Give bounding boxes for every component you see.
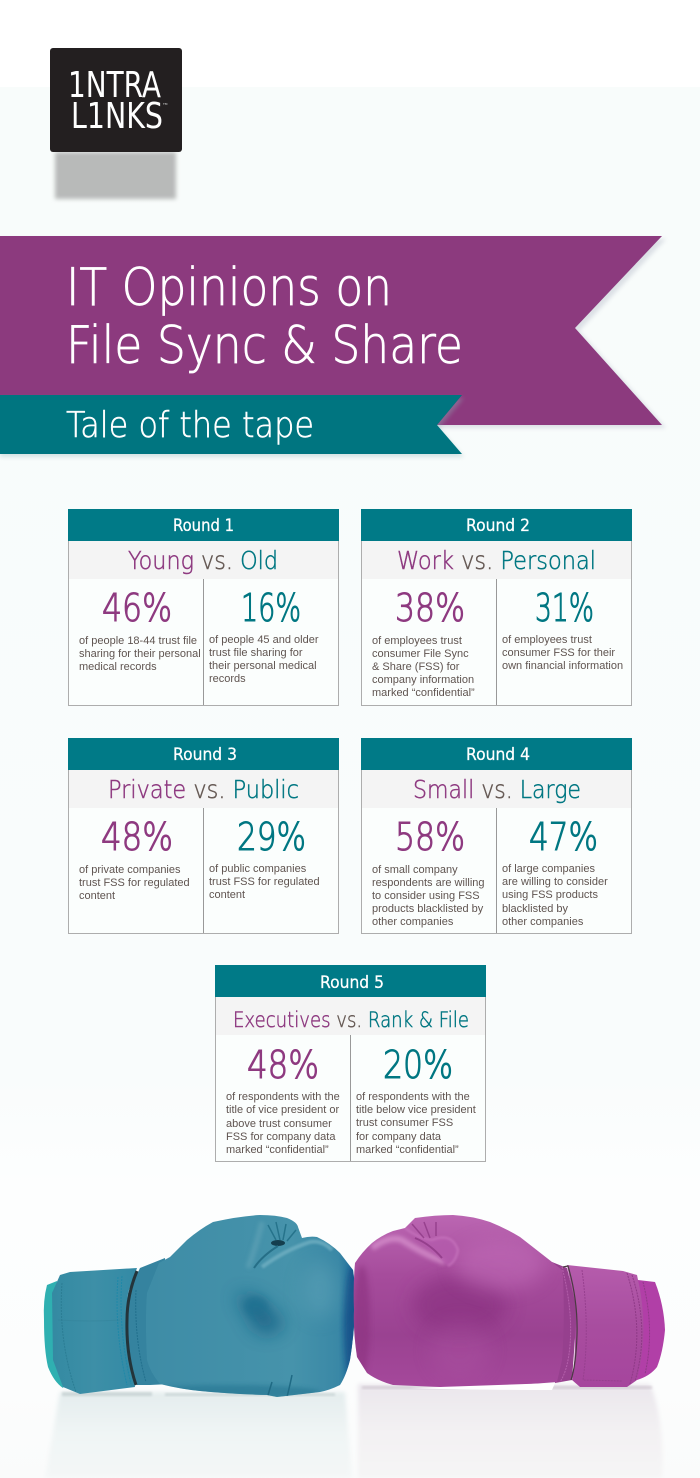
text: round 3 left: content bbox=[79, 890, 115, 902]
text: round 4 left: to consider using FSS bbox=[372, 890, 480, 902]
text: round 5 left: title of vice president or bbox=[226, 1104, 339, 1116]
subtitle ribbon bbox=[0, 395, 464, 457]
panel: round 1: Young vs. Old bbox=[128, 546, 278, 575]
logo: Intralinks: TM bbox=[162, 102, 168, 106]
text: round 3 left: trust FSS for regulated bbox=[79, 877, 190, 889]
panel: round 3: Private vs. Public bbox=[108, 775, 299, 804]
text: round 4 right: blacklisted by bbox=[502, 903, 569, 915]
panel: round 2: Work vs. Personal bbox=[397, 546, 596, 575]
text: round 1 right: of people 45 and older bbox=[209, 634, 319, 646]
panel: round 3 bbox=[68, 738, 339, 934]
panel: round 2 bbox=[361, 509, 632, 706]
text: round 3 right: of public companies bbox=[209, 863, 307, 875]
panel: round 1 bbox=[68, 509, 339, 706]
text: round 4 right: are willing to consider bbox=[502, 876, 608, 888]
text: round 5 right bbox=[356, 1091, 476, 1156]
text: round 5 left: marked “confidential” bbox=[226, 1144, 329, 1156]
text: round 3 right bbox=[209, 863, 320, 901]
panel: round 4: 58% bbox=[395, 815, 465, 859]
panel: round 5 bbox=[215, 965, 486, 1162]
text: round 4 left bbox=[372, 864, 485, 928]
panel: round 5: 48% bbox=[247, 1043, 319, 1087]
title ribbon bbox=[0, 236, 666, 428]
text: round 1 left: medical records bbox=[79, 661, 157, 673]
text: round 3 left: of private companies bbox=[79, 864, 181, 876]
panel: round 1: 46% bbox=[102, 586, 172, 630]
title text: File Sync & Share bbox=[66, 316, 463, 376]
text: round 4 right: using FSS products bbox=[502, 889, 598, 901]
title text bbox=[66, 258, 463, 376]
panel: round 2: Round 2 bbox=[466, 516, 530, 536]
text: round 2 right bbox=[502, 634, 623, 672]
text: round 2 left bbox=[372, 635, 475, 699]
panel: round 2: 38% bbox=[395, 586, 465, 630]
text: round 1 right: their personal medical bbox=[209, 660, 317, 672]
text: round 4 left: other companies bbox=[372, 916, 454, 928]
logo: Intralinks: L1NKS bbox=[71, 96, 163, 137]
text: round 2 right: of employees trust bbox=[502, 634, 592, 646]
panel: round 2: 31% bbox=[535, 586, 594, 630]
icon: teal boxing glove bbox=[44, 1215, 362, 1399]
text: round 3 left bbox=[79, 864, 190, 902]
text: round 2 left: marked “confidential” bbox=[372, 687, 475, 699]
logo: Intralinks bbox=[50, 48, 182, 199]
text: round 5 right: trust consumer FSS bbox=[356, 1117, 453, 1129]
text: round 2 left: consumer File Sync bbox=[372, 648, 469, 660]
text: round 3 right: trust FSS for regulated bbox=[209, 876, 320, 888]
panel: round 4: Round 4 bbox=[466, 745, 530, 765]
text: round 5 left: FSS for company data bbox=[226, 1131, 336, 1143]
text: round 1 right: trust file sharing for bbox=[209, 647, 303, 659]
text: round 2 right: own financial information bbox=[502, 660, 623, 672]
text: round 4 right bbox=[502, 863, 608, 928]
panel: round 4: 47% bbox=[529, 815, 598, 859]
text: round 5 right: of respondents with the bbox=[356, 1091, 470, 1103]
text: round 1 left: sharing for their personal bbox=[79, 648, 201, 660]
text: round 4 left: products blacklisted by bbox=[372, 903, 484, 915]
panel: round 1: Round 1 bbox=[173, 516, 234, 536]
panel: round 4 bbox=[361, 738, 632, 934]
text: round 4 left: of small company bbox=[372, 864, 458, 876]
text: round 5 left: above trust consumer bbox=[226, 1118, 332, 1130]
text: round 1 left bbox=[79, 635, 201, 673]
text: round 5 right: title below vice president bbox=[356, 1104, 476, 1116]
subtitle ribbon: Tale of the tape bbox=[66, 405, 314, 446]
text: round 2 left: of employees trust bbox=[372, 635, 462, 647]
text: round 4 left: respondents are willing bbox=[372, 877, 485, 889]
panel: round 3: 29% bbox=[237, 815, 306, 859]
text: round 3 right: content bbox=[209, 889, 245, 901]
panel: round 5: Round 5 bbox=[320, 973, 384, 993]
text: round 2 right: consumer FSS for their bbox=[502, 647, 615, 659]
panel: round 1: 16% bbox=[241, 586, 301, 630]
text: round 2 left: & Share (FSS) for bbox=[372, 661, 460, 673]
floor reflections bbox=[45, 1384, 662, 1478]
text: round 5 left bbox=[226, 1091, 340, 1156]
text: round 1 right bbox=[209, 634, 319, 685]
text: round 4 right: other companies bbox=[502, 916, 584, 928]
text: round 5 left: of respondents with the bbox=[226, 1091, 340, 1103]
icon: pink boxing glove bbox=[354, 1215, 665, 1390]
text: round 2 left: company information bbox=[372, 674, 474, 686]
title text: IT Opinions on bbox=[66, 258, 392, 318]
panel: round 3: 48% bbox=[101, 815, 173, 859]
text: round 4 right: of large companies bbox=[502, 863, 595, 875]
text: round 1 right: records bbox=[209, 673, 246, 685]
panel: round 5: Executives vs. Rank & File bbox=[233, 1008, 469, 1032]
logo: Intralinks: 1NTRA bbox=[68, 65, 161, 106]
panel: round 4: Small vs. Large bbox=[413, 775, 581, 804]
text: round 5 right: marked “confidential” bbox=[356, 1144, 459, 1156]
text: round 1 left: of people 18-44 trust file bbox=[79, 635, 197, 647]
panel: round 5: 20% bbox=[383, 1043, 453, 1087]
text: round 5 right: for company data bbox=[356, 1131, 442, 1143]
panel: round 3: Round 3 bbox=[173, 745, 237, 765]
